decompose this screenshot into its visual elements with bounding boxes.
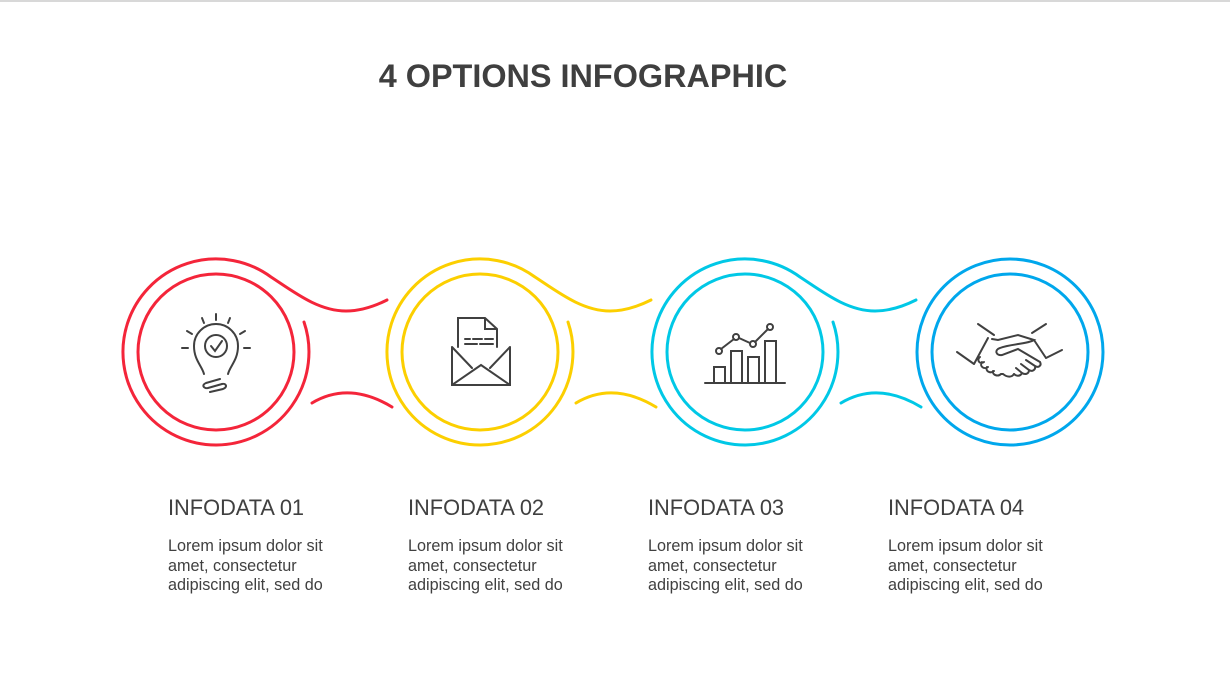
text: infodata 03: [648, 495, 803, 594]
step 1 rings: [123, 259, 392, 445]
text: infodata 01: INFODATA 01: [168, 495, 304, 520]
text: infodata 04: amet, consectetur: [888, 556, 1017, 574]
text: infodata 02: Lorem ipsum dolor sit: [408, 537, 563, 555]
text: infodata 04: INFODATA 04: [888, 495, 1024, 520]
text: infodata 04: adipiscing elit, sed do: [888, 576, 1043, 594]
icon: chart: [705, 324, 785, 383]
text: infodata 04: Lorem ipsum dolor sit: [888, 537, 1043, 555]
icon: envelope: [452, 318, 510, 385]
icon: lightbulb: [182, 314, 250, 392]
text: infodata 02: INFODATA 02: [408, 495, 544, 520]
text: infodata 02: [408, 495, 563, 594]
text: infodata 03: amet, consectetur: [648, 556, 777, 574]
step 4 rings: [917, 259, 1103, 445]
text: infodata 04: [888, 495, 1043, 594]
text: infodata 01: adipiscing elit, sed do: [168, 576, 323, 594]
title: 4 OPTIONS INFOGRAPHIC: [379, 58, 787, 94]
text: infodata 02: amet, consectetur: [408, 556, 537, 574]
text: infodata 01: [168, 495, 323, 594]
text: infodata 02: adipiscing elit, sed do: [408, 576, 563, 594]
text: infodata 01: Lorem ipsum dolor sit: [168, 537, 323, 555]
text: infodata 03: Lorem ipsum dolor sit: [648, 537, 803, 555]
text: infodata 03: INFODATA 03: [648, 495, 784, 520]
icon: handshake: [957, 324, 1062, 377]
step 2 rings: [387, 259, 656, 445]
text: infodata 01: amet, consectetur: [168, 556, 297, 574]
step 3 rings: [652, 259, 921, 445]
text: infodata 03: adipiscing elit, sed do: [648, 576, 803, 594]
